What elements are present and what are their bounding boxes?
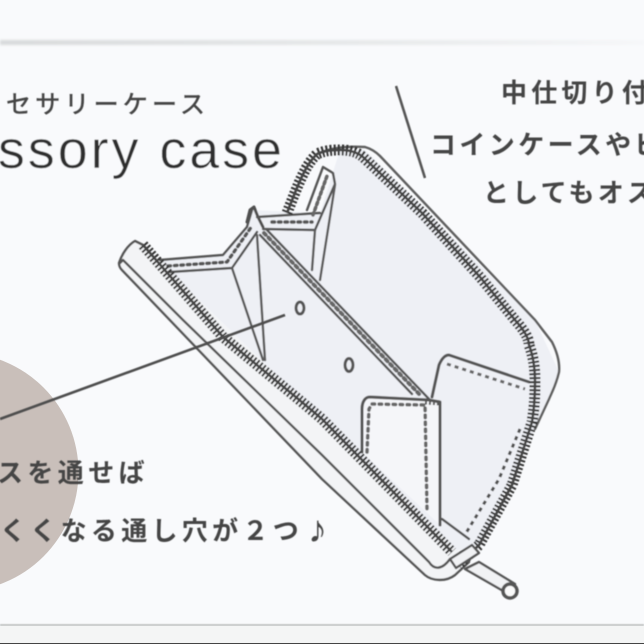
- lower flap: [119, 241, 469, 580]
- stitched band left: [160, 207, 263, 272]
- callout: threading holes text: スを通せば: [0, 458, 149, 488]
- callout: threading holes text: ♪: [308, 509, 331, 551]
- callout: threading holes text: [0, 458, 331, 551]
- leader line: divider callout: [396, 86, 425, 178]
- callout: divider text: [430, 78, 644, 208]
- wallet interior: [160, 150, 559, 552]
- callout: threading holes text: くくなる通し穴が２つ: [0, 516, 303, 546]
- pocket front: [362, 397, 440, 525]
- long diagonal stitched band: [260, 230, 429, 399]
- pocket back: [432, 355, 529, 397]
- decorative beige circle: [0, 352, 78, 592]
- inner divider lines: [232, 185, 335, 360]
- leader line: holes callout: [0, 315, 285, 419]
- stitched band top: [257, 167, 335, 230]
- zipper teeth: [143, 150, 535, 565]
- heading: English: ssory case: [0, 120, 285, 180]
- threading holes: [296, 302, 353, 372]
- stitching along zipper: [466, 429, 520, 533]
- wallet illustration: [119, 147, 559, 598]
- heading: Japanese: セサリーケース: [6, 91, 209, 119]
- pocket lower edge: [442, 519, 469, 539]
- outer zipper tape: [322, 147, 559, 429]
- zipper slider: [450, 545, 517, 598]
